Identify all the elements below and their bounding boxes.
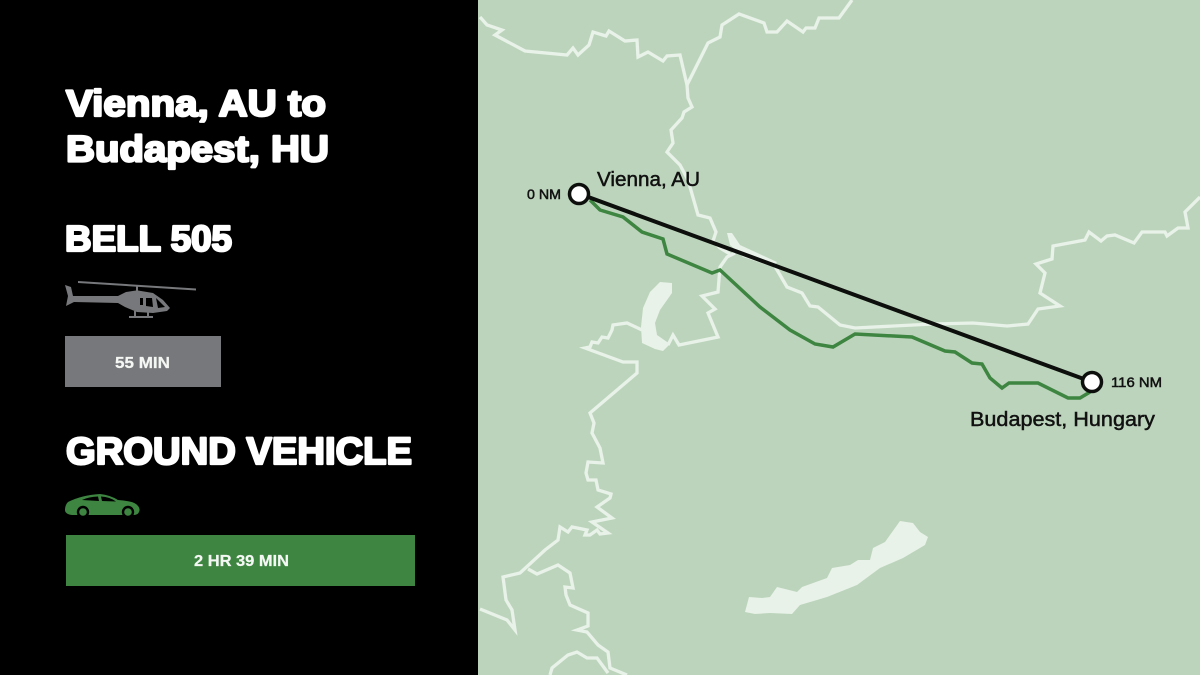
map: country borders xyxy=(480,0,1200,675)
heading: Bell 505: BELL 505 xyxy=(65,218,232,259)
marker: Budapest xyxy=(1082,372,1102,392)
bar: helicopter time xyxy=(65,336,221,387)
label: Vienna, AU: Vienna, AU xyxy=(597,168,700,191)
route: ground vehicle xyxy=(590,200,1090,398)
map: Danube wedge xyxy=(727,233,777,267)
bar: ground vehicle time: 2 HR 39 MIN xyxy=(194,553,289,570)
panel: sidebar xyxy=(0,0,478,675)
route: helicopter straight line xyxy=(580,194,1092,382)
icon: car xyxy=(65,494,140,517)
bar: helicopter time: 55 MIN xyxy=(115,355,170,372)
marker: Vienna xyxy=(570,184,588,204)
map: Lake Balaton xyxy=(745,521,928,614)
label: 0 NM: 0 NM xyxy=(527,187,561,202)
label: Budapest, Hungary: Budapest, Hungary xyxy=(970,408,1156,431)
panel: map xyxy=(478,0,1200,675)
bar: ground vehicle time xyxy=(66,535,415,586)
heading: Ground Vehicle: GROUND VEHICLE xyxy=(66,431,412,473)
title: Vienna, AU to xyxy=(66,82,326,124)
label: 116 NM: 116 NM xyxy=(1111,374,1162,390)
icon: helicopter xyxy=(65,281,196,318)
title: Budapest, HU xyxy=(66,128,329,170)
map: Lake Neusiedl xyxy=(641,282,672,351)
